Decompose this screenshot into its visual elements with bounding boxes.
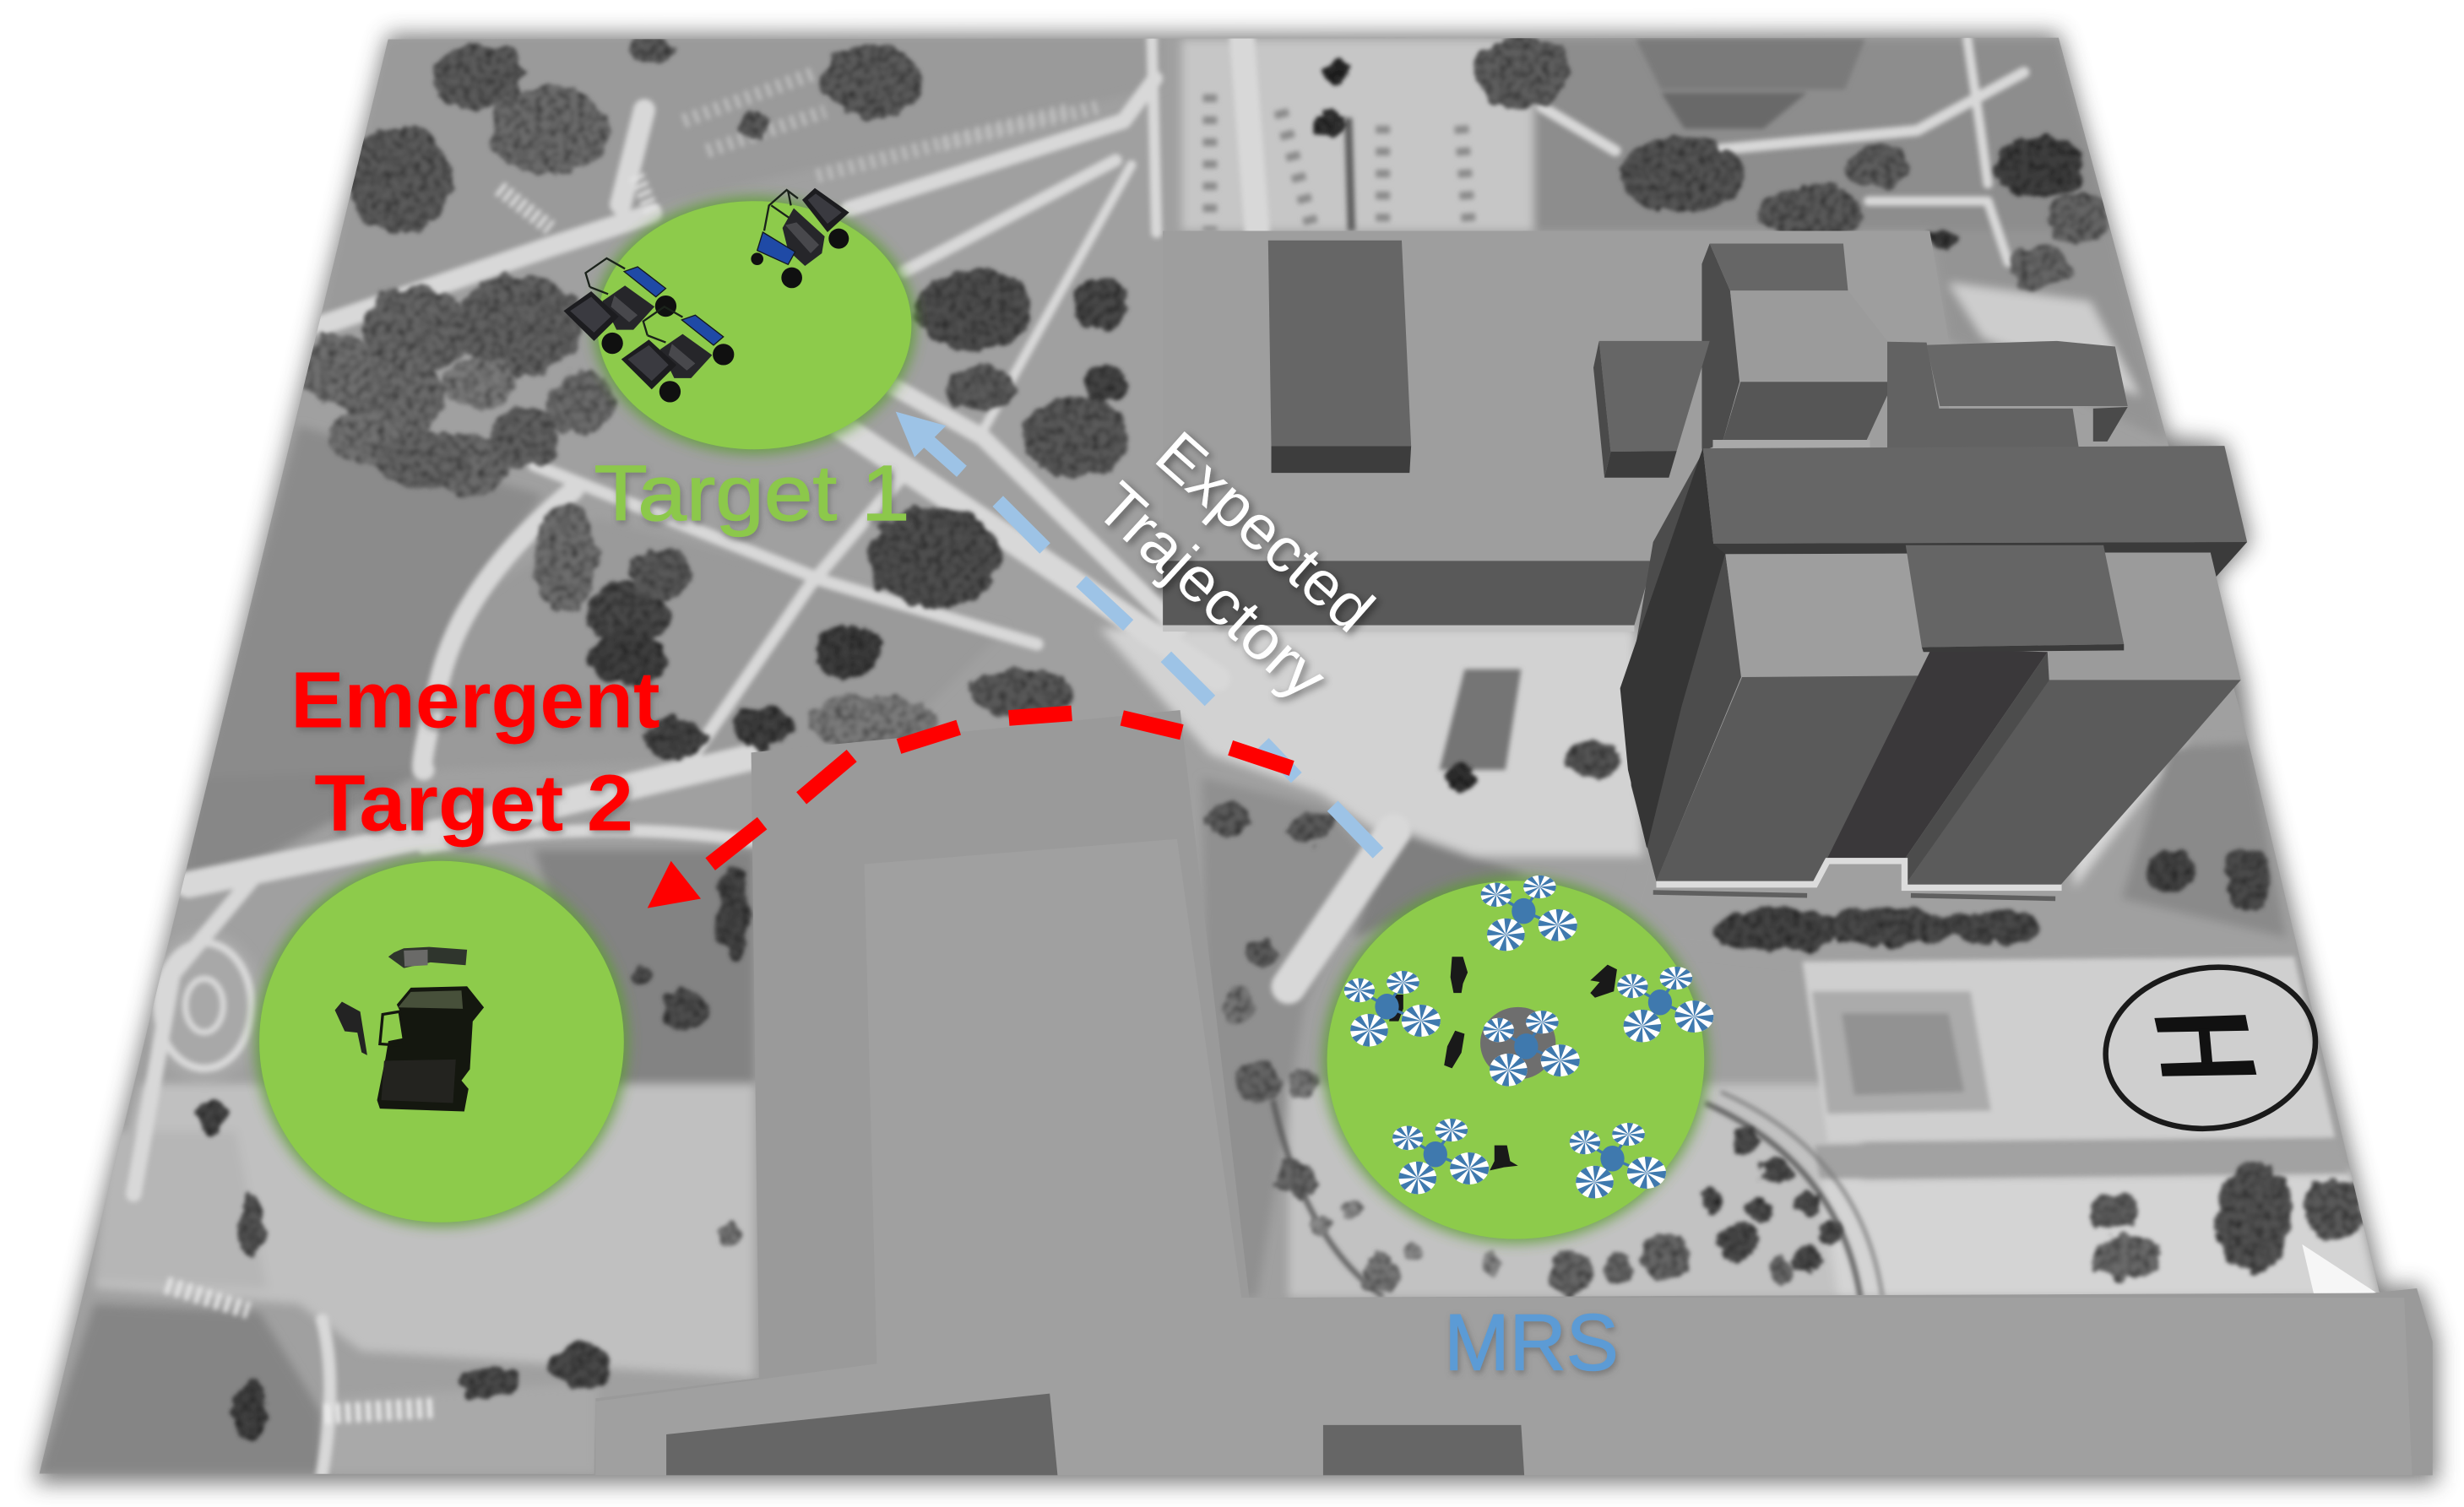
small detail: white corner patch <box>2302 1244 2379 1298</box>
walkways <box>133 31 2024 1474</box>
building: tower complex <box>1593 243 2247 898</box>
roof dark block top <box>1268 241 1411 447</box>
emergent dashed red arrow <box>648 713 1292 908</box>
label: Expected Trajectory: Trajectory <box>1083 469 1341 713</box>
building: upper wide block <box>1163 231 1949 632</box>
sharper painted areas <box>1440 40 2347 1179</box>
drones <box>1344 875 1713 1199</box>
tower two <box>2049 552 2241 680</box>
manhole under central drone <box>1480 1007 1555 1079</box>
label: Expected Trajectory <box>1083 418 1387 713</box>
label: Emergent Target 2 <box>290 656 660 848</box>
dark roof block right <box>1323 1425 1524 1475</box>
icon: three ground vehicles <box>564 188 849 403</box>
people on the ground <box>1389 957 1617 1170</box>
label: Expected Trajectory: Expected <box>1142 418 1387 645</box>
light plinth edge <box>1656 861 2062 887</box>
expected trajectory dashed arrow <box>896 412 1378 853</box>
label: Target 1: Target 1 <box>594 449 910 537</box>
target 2 zone <box>255 856 628 1227</box>
MRS zone <box>1322 875 1713 1244</box>
label: Emergent Target 2: Emergent <box>290 656 660 745</box>
label: MRS: MRS <box>1444 1298 1619 1388</box>
dark roof block left <box>666 1394 1057 1475</box>
helipad marking: circled H <box>2095 954 2326 1142</box>
building front wall <box>1163 561 1653 626</box>
tower one <box>1725 554 1931 678</box>
roof plate between towers <box>1906 545 2124 648</box>
building: lower L-shaped block <box>594 710 2433 1475</box>
label: Emergent Target 2: Target 2 <box>314 758 633 848</box>
target 1 zone <box>564 188 916 454</box>
parked cars and crosswalks <box>166 73 1882 1414</box>
icon: vehicle and two people <box>335 947 484 1111</box>
